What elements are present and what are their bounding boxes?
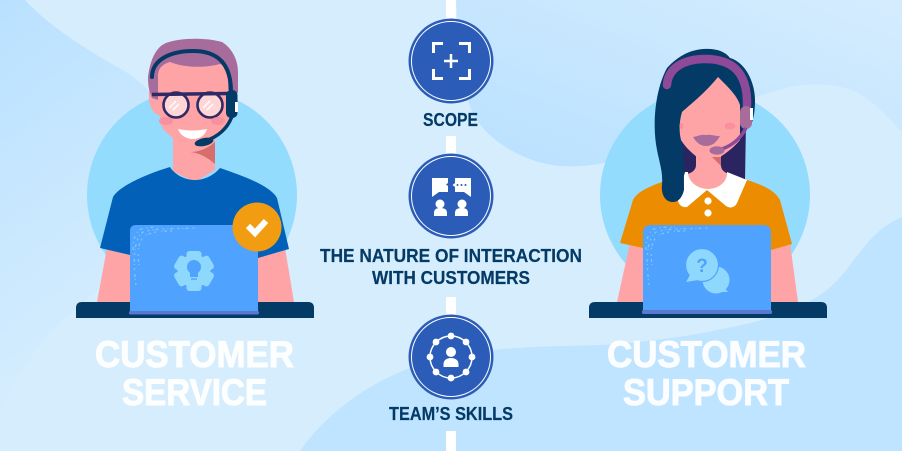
background shape: left	[0, 0, 200, 414]
headset band	[152, 51, 231, 92]
backdrop circle	[600, 90, 810, 300]
desk	[589, 302, 827, 318]
smile	[178, 129, 207, 139]
cheeks	[680, 122, 736, 130]
label: scope: SCOPE	[423, 110, 478, 130]
heading: customer service: SERVICE	[122, 372, 267, 413]
central divider line	[446, 0, 456, 451]
icon: question chat bubbles	[686, 248, 730, 294]
shirt	[620, 180, 792, 250]
heading: customer support	[607, 334, 806, 413]
hair	[148, 39, 238, 100]
glasses	[152, 92, 228, 118]
icon: check badge	[232, 202, 282, 252]
heading: customer support: CUSTOMER	[607, 334, 806, 375]
background shape: top right	[456, 0, 902, 166]
desk	[76, 302, 314, 318]
neck	[170, 135, 215, 182]
back hair	[682, 120, 746, 182]
icon circle: team's skills	[408, 314, 494, 400]
hair	[655, 49, 755, 202]
icon circle: scope	[408, 18, 494, 104]
laptop	[642, 225, 772, 314]
icon: gear with light bulb	[173, 251, 215, 291]
headset	[667, 59, 753, 155]
face	[680, 77, 740, 157]
arms	[97, 248, 294, 302]
collar	[678, 172, 747, 207]
illustration: customer support agent	[589, 49, 827, 318]
laptop	[129, 225, 259, 314]
face	[149, 60, 230, 143]
cheeks	[159, 117, 225, 125]
icon: question chat bubbles: ?	[696, 256, 708, 277]
icon circle: nature of interaction	[408, 154, 494, 238]
label: team's skills: TEAM’S SKILLS	[389, 404, 513, 424]
arms	[617, 243, 798, 302]
t-shirt	[100, 167, 289, 258]
heading: customer service: CUSTOMER	[95, 334, 294, 375]
neck shadow	[712, 157, 721, 166]
label: nature of interaction	[320, 246, 582, 288]
neck	[687, 150, 729, 190]
heading: customer support: SUPPORT	[623, 372, 789, 413]
label: nature of interaction: THE NATURE OF INTERACTION	[320, 246, 582, 266]
background shape: bottom right	[300, 217, 902, 451]
label: nature of interaction: WITH CUSTOMERS	[372, 268, 530, 288]
lips	[693, 135, 720, 146]
illustration: customer service agent	[76, 39, 314, 318]
buttons	[704, 197, 712, 217]
backdrop circle	[87, 90, 297, 300]
heading: customer service	[95, 334, 294, 413]
headset ear pad and mic	[194, 90, 238, 148]
neck shadow	[190, 142, 215, 164]
